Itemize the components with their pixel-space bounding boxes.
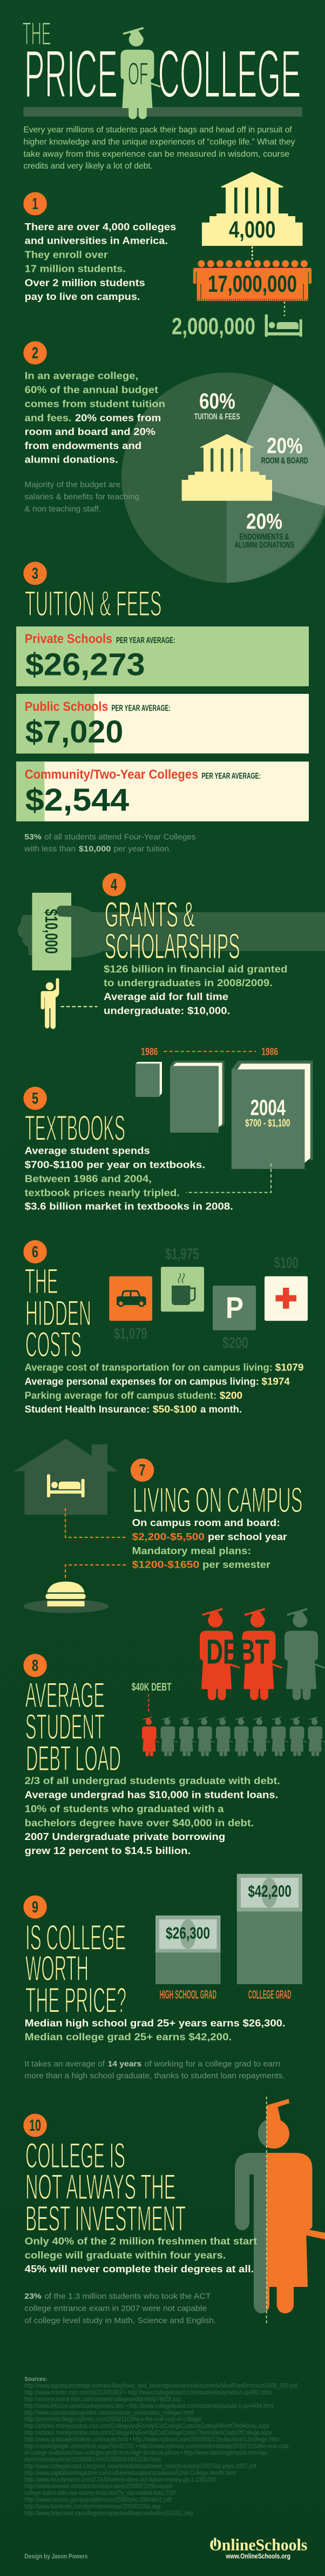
text block: $1200-$1650: [132, 1560, 199, 1570]
sources list: http://www.usaeducationguides.com/american_universities_colleges.html: [24, 2408, 193, 2416]
note text: of college level study in Math, Science and English.: [24, 2316, 216, 2325]
icon: graduates with debt: [200, 1608, 325, 1700]
number badge 1: [23, 192, 47, 215]
sources list: [24, 2376, 297, 2517]
icon: medium book: [170, 1061, 225, 1133]
heading: COSTS: [25, 1324, 82, 1364]
text block: [25, 1146, 233, 1212]
number badge 10: 10: [29, 2117, 41, 2135]
note text: of all students attend Four-Year Colleges: [44, 832, 196, 841]
text block: [25, 222, 176, 302]
number badge 6: 6: [32, 1243, 38, 1261]
note text: with less than: [24, 845, 76, 854]
text block: textbook prices nearly tripled.: [25, 1187, 180, 1198]
design credit: Design by Jason Powers: [24, 2553, 88, 2560]
pie chart: 60%: [199, 389, 235, 413]
text block: $1974: [261, 1376, 290, 1387]
text block: Median college grad 25+ earns $42,200.: [25, 2032, 232, 2043]
number badge 3: [23, 562, 47, 585]
timeline label end: 1986: [261, 1047, 278, 1058]
cost label coffee: $1,975: [165, 1246, 199, 1263]
bar: private schools: Private Schools: [25, 632, 112, 646]
note text: [24, 480, 139, 514]
text block: Over 2 million students: [25, 277, 145, 288]
sources list: dyn/content/article/2008/08/19/AR2008081903230.html: [24, 2455, 160, 2463]
intro paragraph: higher knowledge and the unique experiences of “college life.” What they: [23, 137, 295, 147]
icon: large book: 2004: [250, 1095, 286, 1120]
text block: $700-$1100 per year on textbooks.: [25, 1160, 205, 1170]
bar: private schools: [16, 626, 309, 686]
text block: a month.: [200, 1404, 242, 1415]
panel: section 6 hidden costs: HIDDEN: [25, 1293, 91, 1333]
text block: Average student spends: [25, 1146, 150, 1156]
panel: section 9 worth the price: HIGH SCHOOL GRAD: [160, 1988, 216, 2001]
heading: COLLEGE IS: [25, 2136, 125, 2176]
panel: section 5 textbooks: [23, 1047, 313, 1212]
bar: public schools: Public Schools: [25, 700, 108, 714]
note text: college entrance exam in 2007 were not capable: [24, 2304, 207, 2313]
icon: student raising hand: [41, 978, 59, 1029]
panel: section 7 living on campus: [14, 1438, 302, 1613]
pictogram: ten graduates: [142, 1717, 325, 1756]
number badge 2: 2: [32, 344, 38, 362]
bar: college grad: [237, 1874, 302, 1984]
bar: private schools: PER YEAR AVERAGE:: [116, 636, 175, 645]
text block: [25, 2018, 286, 2043]
cost label car: $1,079: [114, 1325, 147, 1342]
bar: community colleges: Community/Two-Year Colleges: [25, 767, 198, 782]
icon: college building with 4,000: 4,000: [229, 217, 275, 243]
text block: per semester: [202, 1560, 270, 1570]
pie chart: ALUMNI DONATIONS: [234, 540, 294, 550]
number badge 8: [23, 1654, 47, 1677]
note text: more than a high school graduate, thanks to student loan repayments.: [24, 2071, 285, 2080]
text block: There are over 4,000 colleges: [25, 222, 176, 232]
text block: [25, 1776, 280, 1856]
text block: 10% of students who graduated with a: [25, 1803, 225, 1814]
connector: [284, 302, 285, 316]
panel: section 8 debt load: [23, 1608, 325, 1856]
icon: college building with 4,000: [202, 172, 302, 246]
panel: section 3 tuition and fees: TUITION & FEES: [25, 583, 161, 623]
text block: from endowments and: [25, 440, 141, 451]
icon: split graduate figure: [235, 2097, 325, 2325]
icon: banknote: [32, 893, 71, 971]
icon: parking tile: [213, 1286, 256, 1330]
panel: section 5 textbooks: TEXTBOOKS: [25, 1108, 125, 1148]
icon: thumb: [57, 906, 72, 917]
icon: crowd of students with 17,000,000: [193, 260, 312, 300]
connector: room: [65, 1508, 126, 1537]
pie chart: 20%: [267, 433, 302, 458]
text block: Student Health Insurance:: [25, 1404, 150, 1415]
number badge 2: [23, 342, 47, 364]
icon: medical cross tile: [265, 1276, 308, 1321]
heading: NOT ALWAYS THE: [25, 2166, 176, 2206]
text block: [132, 1517, 287, 1570]
heading: [105, 894, 240, 966]
text block: comes from student tuition: [25, 398, 165, 409]
timeline dashes: [164, 1051, 256, 1052]
icon: coffee tile: [161, 1267, 204, 1312]
connector: meals: [65, 1565, 126, 1578]
text block: [25, 1362, 303, 1415]
text block: and universities in America.: [25, 236, 168, 246]
text block: pay to live on campus.: [25, 291, 140, 302]
sources list: http://economix.blogs.nytimes.com/2009/11/19/q-a-the-real-cost-of-college/: [24, 2416, 202, 2423]
panel: section 8 debt load: DEBT LOAD: [26, 1738, 121, 1778]
sources list: http://www.mucdynamo.com/2.7643/where-does-our-tuition-money-go-1.1083760: [24, 2475, 216, 2483]
sources list: http://www.usnews.com/articles/education/2009/01/09/unpaid-: [24, 2483, 174, 2490]
bar: private schools: $26,273: [25, 647, 145, 682]
panel: section 2 budget: [23, 342, 325, 583]
heading: [25, 1261, 91, 1364]
text block: On campus room and board:: [132, 1517, 280, 1528]
note text: salaries & benefits for teaching: [24, 492, 139, 501]
note text: 23%: [24, 2292, 42, 2301]
pie chart: ENDOWMENTS &: [239, 532, 289, 541]
title block: THE: [23, 16, 51, 52]
sources list: http://www.census.gov/population/cen2000/phc-t26/tab01.pdf: [24, 2495, 172, 2503]
pie chart: [121, 373, 325, 583]
number badge 10: [23, 2114, 47, 2137]
sources list: of-college-textbooks/how-colleges-profit-from-high-textbook-prices • http://www.washingtonpost.com/wp-: [24, 2449, 268, 2457]
number badge 7: [131, 1458, 154, 1482]
number badge 8: 8: [32, 1657, 38, 1675]
icon: large book: [232, 1061, 313, 1169]
icon: college building: [182, 434, 272, 501]
icon: house: [14, 1438, 118, 1515]
logo: OnlineSchools: www.OnlineSchools.org: [226, 2552, 290, 2560]
note text: & non teaching staff.: [24, 505, 101, 514]
text block: 17 million students.: [25, 263, 126, 274]
note text: [24, 2059, 285, 2080]
heading: THE: [25, 1261, 58, 1301]
text block: Average personal expenses for on campus living:: [25, 1376, 259, 1387]
panel: section 4 grants and scholarships: [18, 873, 325, 1029]
icon: bed: [265, 315, 302, 337]
text block: Median high school grad 25+ years earns $26,300.: [25, 2018, 286, 2029]
bar: public schools: PER YEAR AVERAGE:: [111, 704, 171, 713]
bar: public schools: $7,020: [25, 714, 123, 750]
sources list: Sources:: [24, 2376, 48, 2383]
number badge 3: 3: [32, 565, 38, 583]
heading: WORTH: [25, 1948, 89, 1988]
text block: room and board and 20%: [25, 426, 155, 437]
bar: public schools: [16, 694, 309, 753]
sources list: http://moneycentral.msn.com/content/collegeandfamily/p74829.asp: [24, 2395, 181, 2403]
text block: $1079: [275, 1362, 303, 1373]
connector: [252, 246, 253, 259]
note text: Majority of the budget are: [24, 480, 120, 490]
connector: [148, 1694, 149, 1713]
pie chart: TUITION & FEES: [194, 412, 240, 421]
title block: OF: [128, 57, 148, 92]
text block: [25, 371, 165, 465]
heading: GRANTS &: [105, 894, 195, 934]
sources list: http://www.capitalismmagazine.com/culture/education/academia/5248-College-Worth.html: [24, 2469, 235, 2477]
text block: bachelors degree have over $40,000 in debt.: [25, 1817, 254, 1828]
text block: 60% of the annual budget: [25, 384, 158, 395]
note text: It takes an average of: [24, 2059, 105, 2069]
sources list: http://www.bankrate.com/brm/news/insur/20030109a.asp: [24, 2503, 161, 2510]
panel: section 9 worth the price: THE PRICE?: [25, 1980, 126, 2020]
note text: [24, 832, 196, 854]
figure: 2,000,000: 2,000,000: [172, 313, 255, 339]
text block: 2007 Undergraduate private borrowing: [25, 1831, 225, 1842]
text block: $50-$100: [153, 1404, 197, 1415]
number badge 7: 7: [139, 1461, 146, 1480]
connector: [186, 1163, 271, 1193]
text block: to undergraduates in 2008/2009.: [104, 978, 273, 988]
note text: 14 years: [108, 2059, 141, 2069]
text block: 20% comes from: [75, 412, 161, 423]
number badge 5: 5: [32, 1089, 38, 1108]
sources list: http://www.msnbc.msn.com/id/21420361/ • http://www.collegeboard.com/student/pay/add-it-up/482.html: [24, 2388, 272, 2396]
text block: $126 billion in financial aid granted: [104, 964, 287, 974]
logo: OnlineSchools: OnlineSchools: [209, 2535, 307, 2554]
text block: They enroll over: [25, 250, 108, 260]
title band: [23, 107, 302, 117]
text block: per school year: [208, 1531, 287, 1542]
number badge 4: [103, 873, 126, 896]
bar: community colleges: PER YEAR AVERAGE:: [202, 772, 261, 781]
icon: parking tile: P: [226, 1290, 243, 1324]
note text: of the 1.3 million students who took the ACT: [44, 2292, 211, 2301]
panel: section 6 hidden costs: [23, 1240, 308, 1415]
icon: car tile: [109, 1276, 152, 1321]
cost label medical: $100: [274, 1255, 299, 1272]
heading: [25, 2136, 186, 2238]
text block: [104, 964, 287, 1016]
text block: Between 1986 and 2004,: [25, 1174, 152, 1185]
text block: Average aid for full time: [104, 992, 228, 1002]
panel: section 10 not the best investment: [23, 2097, 325, 2325]
text block: 2/3 of all undergrad students graduate with debt.: [25, 1776, 280, 1787]
icon: arm: [71, 906, 325, 958]
note text: per year tuition.: [113, 845, 172, 854]
text block: undergraduate: $10,000.: [104, 1006, 230, 1016]
text block: $200: [220, 1390, 242, 1401]
panel: section 9 worth the price: [23, 1874, 302, 2080]
text block: Average cost of transportation for on campus living:: [25, 1362, 273, 1373]
text block: $3.6 billion market in textbooks in 2008.: [25, 1201, 233, 1212]
text block: 45% will never complete their degrees at all.: [25, 2264, 254, 2274]
number badge 9: 9: [32, 1898, 38, 1916]
number badge 1: 1: [32, 195, 38, 213]
number badge 6: [23, 1240, 47, 1263]
sources list: http://articles.moneycentral.msn.com/CollegeAndFamily/CutCollegeCosts/TheHiddenCostsOfCollege.aspx: [24, 2428, 272, 2436]
heading: AVERAGE: [25, 1675, 105, 1715]
heading: [25, 1675, 121, 1778]
bar: community colleges: [16, 761, 309, 821]
title block: PRICE: [24, 37, 118, 112]
banknote amount: $10,000: [42, 909, 61, 954]
icon: large book: $700 - $1,100: [245, 1118, 290, 1129]
bar: high school grad: [155, 1916, 220, 1984]
cost label parking: $200: [222, 1334, 248, 1351]
icon: fist behind note: [18, 915, 32, 955]
note text: 53%: [24, 832, 42, 841]
text block: alumni donations.: [25, 454, 118, 465]
number badge 4: 4: [111, 876, 117, 894]
intro paragraph: credits and very likely a lot of debt.: [23, 162, 153, 171]
text block: $2,200-$5,500: [132, 1531, 205, 1542]
title block: [23, 16, 302, 119]
icon: graduate figure: [120, 27, 161, 119]
panel: section 1 colleges: [23, 172, 312, 339]
panel: section 9 worth the price: IS COLLEGE: [25, 1917, 126, 1957]
text block: grew 12 percent to $14.5 billion.: [25, 1845, 191, 1856]
intro paragraph: [23, 125, 295, 171]
note text: $10,000: [79, 845, 111, 854]
bar: high school grad: $26,300: [166, 1924, 210, 1942]
panel: section 3 tuition and fees: [16, 562, 309, 854]
text block: In an average college,: [25, 371, 138, 382]
bar: college grad: $42,200: [248, 1882, 292, 1901]
icon: bed: [47, 1474, 85, 1497]
text block: and fees.: [25, 412, 72, 423]
sources list: http://articles.moneycentral.msn.com/CollegeAndFamily/CutCollegeCosts/IsCollegeWorthTheMoney.aspx: [24, 2422, 269, 2430]
bar: community colleges: $2,544: [25, 782, 129, 818]
heading: STUDENT: [25, 1707, 105, 1747]
icon: small book: [136, 1062, 162, 1097]
sources list: http://www.briercrest.ca/college/prospective/finances/tuition201011.asp: [24, 2509, 193, 2517]
text block: Parking average for off campus student:: [25, 1390, 216, 1401]
heading: [25, 1917, 126, 2020]
note text: of working for a college grad to earn: [145, 2059, 280, 2069]
icon: graduates with debt: DEBT: [206, 1632, 269, 1671]
text block: Mandatory meal plans:: [132, 1545, 251, 1556]
pie chart: 20%: [246, 508, 282, 533]
icon: crowd of students with 17,000,000: 17,000,000: [208, 271, 297, 297]
sources list: http://www.graduateshotline.com/costs.html • http://www.nytimes.com/2009/08/12/education/12college.html: [24, 2436, 279, 2443]
timeline label 1986: 1986: [141, 1047, 158, 1058]
sources list: college-tuition-bills-rise-survey-finds.html?s_cid=related-links:TOP: [24, 2489, 176, 2497]
sources list: http://www.infozee.com/usa/expenses.htm • http://www.collegeboard.com/student/pay/add-it-up/4494.html: [24, 2402, 274, 2410]
text block: Only 40% of the 2 million freshmen that start: [25, 2236, 257, 2246]
text block: college will graduate within four years.: [25, 2250, 226, 2260]
intro paragraph: take away from this experience can be measured in wisdom, course: [23, 150, 289, 159]
label: $40K debt: $40K DEBT: [132, 1681, 172, 1693]
intro paragraph: Every year millions of students pack their bags and head off in pursuit of: [23, 125, 292, 135]
text block: Average undergrad has $10,000 in student loans.: [25, 1790, 278, 1801]
sources list: http://www.collegeboard.com/prod_downloads/about/news_info/cbsenior/yr2007/ed-pays-2007.pdf: [24, 2462, 256, 2470]
icon: burger on plate: [24, 1582, 109, 1613]
note text: [24, 2292, 216, 2325]
text block: [25, 2236, 257, 2274]
number badge 9: [23, 1896, 47, 1918]
number badge 5: [23, 1087, 47, 1110]
connector: [60, 1006, 97, 1007]
